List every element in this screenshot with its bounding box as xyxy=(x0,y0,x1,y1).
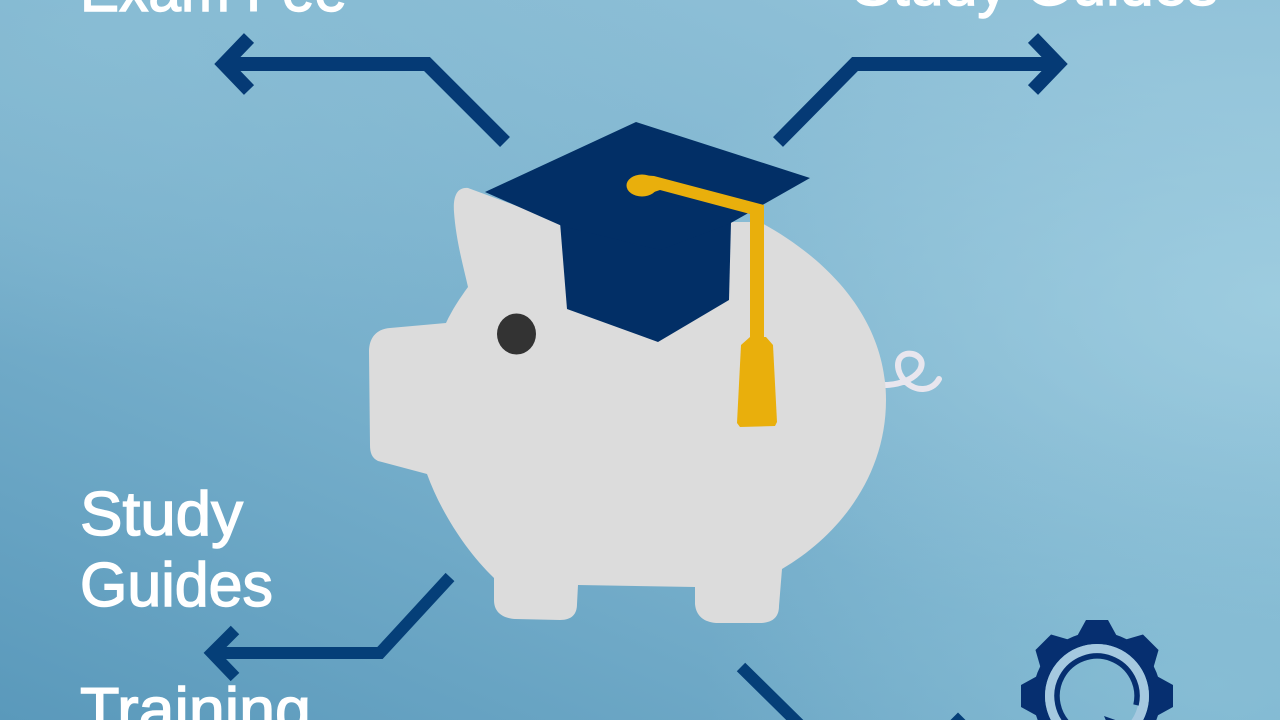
tassel cord xyxy=(640,175,764,340)
cord knob xyxy=(626,174,658,196)
gear teeth xyxy=(1021,620,1173,720)
arrow: top right xyxy=(778,38,1058,142)
label: study guides bottom left: Study xyxy=(80,480,243,549)
arrow: bottom left xyxy=(212,577,450,677)
gear pointer xyxy=(1104,716,1121,720)
arrow: bottom right xyxy=(741,667,976,720)
pig eye xyxy=(497,314,536,354)
pig tail xyxy=(884,354,939,389)
label: guides second line: Guides xyxy=(80,551,273,620)
arrow: top left xyxy=(224,38,505,142)
pig body xyxy=(369,188,886,623)
graduation cap xyxy=(485,122,810,427)
gear ring xyxy=(1039,638,1155,720)
piggy bank xyxy=(369,188,939,623)
mortarboard xyxy=(485,122,810,250)
light inner ring xyxy=(1050,649,1144,720)
inner arc xyxy=(1057,656,1137,720)
tassel xyxy=(737,337,777,427)
cap base xyxy=(560,222,731,342)
icon: gear xyxy=(1021,620,1173,720)
